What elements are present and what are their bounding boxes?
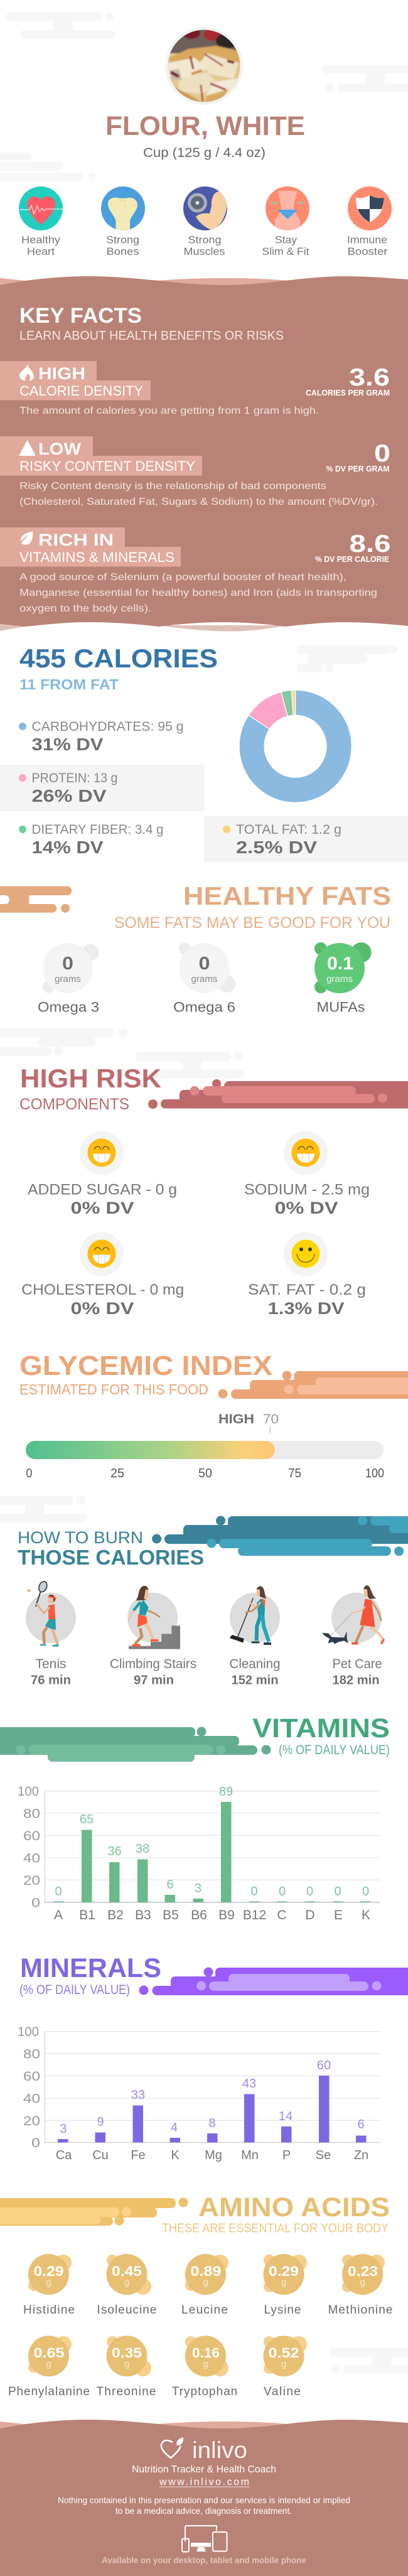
risk: sodium	[244, 1131, 370, 1217]
amino acid bubbles: 0.29	[34, 2263, 64, 2279]
legend: macronutrients: DIETARY FIBER: 3.4 g	[31, 822, 163, 837]
icon: leaf	[21, 531, 33, 545]
amino acid bubbles: 0.29	[269, 2263, 299, 2279]
amino acid bubbles: g	[46, 2277, 51, 2288]
bar chart: vitamins: 0	[279, 1885, 286, 1899]
bar chart: minerals: 60	[23, 2069, 40, 2084]
fact: high calorie density: CALORIES PER GRAM	[306, 388, 390, 397]
food photo	[163, 25, 245, 107]
subheading: minerals: (% OF DAILY VALUE)	[19, 1983, 130, 1997]
fat: omega 3: grams	[55, 974, 81, 984]
amino acid bubbles: 0.52	[269, 2345, 299, 2361]
icon: healthy heart	[19, 186, 63, 257]
amino acid bubbles: g	[360, 2277, 365, 2288]
risk: added sugar: ADDED SUGAR - 0 g	[28, 1182, 177, 1198]
icon: healthy heart: Heart	[27, 245, 55, 257]
decoration: glycemic banner	[218, 1371, 408, 1399]
activity: tennis: Tenis	[35, 1657, 67, 1671]
fat: omega 3: 0	[62, 954, 73, 974]
logo: inlivo	[161, 2437, 247, 2463]
bar chart: minerals: P	[282, 2148, 291, 2162]
icon: strong muscles	[183, 186, 227, 257]
amino acid bubbles: Valine	[264, 2385, 301, 2398]
fact: high calorie density: The amount of calories you are getting from 1 gram is high.	[19, 406, 319, 416]
amino acid bubbles: 0.45	[112, 2263, 142, 2279]
bar chart: vitamins: K	[362, 1908, 370, 1922]
bar chart: vitamins: B5	[163, 1908, 179, 1922]
bar chart: vitamins: 100	[18, 1784, 39, 1799]
fat: mufas: 0.1	[327, 954, 353, 974]
bar chart: vitamins: 3	[195, 1882, 201, 1895]
bar chart: minerals: Se	[316, 2148, 331, 2162]
bar chart: vitamins: 36	[107, 1845, 122, 1858]
icon: strong bones: Strong	[106, 234, 139, 246]
bar chart: vitamins: 60	[23, 1829, 40, 1843]
bar chart: vitamins: 0	[306, 1885, 313, 1899]
panel: key facts	[0, 276, 408, 632]
risk: sodium: 0% DV	[275, 1199, 338, 1217]
amino acid bubbles: g	[281, 2359, 286, 2369]
bar chart: vitamins: C	[277, 1908, 287, 1922]
icon: devices	[182, 2526, 227, 2552]
bar chart: vitamins: 89	[219, 1785, 233, 1799]
bar chart: minerals: 100	[18, 2025, 39, 2039]
fact: rich in vitamins and minerals: % DV PER CALORIE	[315, 554, 389, 564]
fact: rich in vitamins and minerals	[0, 527, 390, 614]
legend: macronutrients: 31% DV	[31, 735, 104, 754]
legend: macronutrients	[0, 719, 408, 862]
fat: omega 6: Omega 6	[173, 1000, 235, 1015]
fact: rich in vitamins and minerals: RICH IN	[38, 531, 114, 549]
amino acid bubbles: Methionine	[328, 2304, 393, 2317]
glycemic index gauge: 25	[110, 1467, 124, 1480]
bar chart: vitamins: 80	[23, 1807, 40, 1821]
risk: saturated fat: SAT. FAT - 0.2 g	[248, 1281, 366, 1298]
icon: immune booster	[347, 186, 392, 257]
activity: pet care: Pet Care	[333, 1657, 382, 1671]
fat: mufas: grams	[326, 974, 353, 984]
fat: omega 6	[173, 943, 235, 1015]
glycemic index gauge	[26, 1412, 384, 1480]
amino acid bubbles: Histidine	[23, 2304, 75, 2317]
risk: added sugar: 0% DV	[70, 1199, 134, 1217]
bar chart: minerals: Mg	[205, 2148, 222, 2162]
icon: immune booster: Immune	[347, 234, 387, 246]
fact: low risky content density: Risky Content density is the relationship of bad components	[19, 481, 326, 492]
amino acid bubbles: g	[46, 2359, 51, 2369]
fact: rich in vitamins and minerals: A good source of Selenium (a powerful booster of heart health),	[19, 572, 346, 583]
fact: high calorie density: 3.6	[349, 364, 390, 391]
title: FLOUR, WHITE	[105, 111, 305, 141]
decoration: minerals banner	[139, 1968, 408, 1995]
fact: low risky content density	[0, 436, 390, 507]
decoration: vitamins banner	[0, 1727, 271, 1762]
decoration: healthy fats banner	[0, 887, 72, 913]
website: www.inlivo.com	[159, 2477, 249, 2487]
fact: high calorie density: CALORIE DENSITY	[19, 383, 143, 399]
fat: omega 6: grams	[191, 974, 217, 984]
fat: omega 6: 0	[198, 954, 210, 974]
bar chart: minerals: Cu	[92, 2148, 109, 2162]
amino acid bubbles: g	[203, 2359, 208, 2369]
activity: cleaning: Cleaning	[230, 1657, 280, 1671]
risk: added sugar	[28, 1131, 177, 1217]
bar chart: vitamins: 0	[31, 1896, 40, 1910]
glycemic index gauge: 75	[288, 1467, 301, 1480]
risk: cholesterol: CHOLESTEROL - 0 mg	[21, 1281, 184, 1298]
heading: how to burn: HOW TO BURN	[18, 1528, 143, 1547]
icon: flame	[19, 364, 34, 380]
bar chart: vitamins: 0	[362, 1885, 369, 1899]
amino acid bubbles: 0.89	[191, 2263, 221, 2279]
subheading: vitamins: (% OF DAILY VALUE)	[279, 1743, 390, 1757]
fact: low risky content density: LOW	[38, 439, 82, 458]
bar chart: vitamins: B1	[79, 1908, 95, 1922]
bar chart: vitamins: B3	[135, 1908, 151, 1922]
serving size: Cup (125 g / 4.4 oz)	[143, 146, 266, 160]
amino acid bubbles: g	[124, 2359, 129, 2369]
bar chart: minerals: 33	[131, 2088, 145, 2102]
icon: healthy heart: Healthy	[21, 234, 61, 246]
fat: mufas: MUFAs	[316, 1000, 365, 1015]
icon: slim and fit	[262, 186, 309, 257]
icon: immune booster: Booster	[348, 245, 388, 257]
amino acid bubbles: 0.16	[192, 2345, 220, 2361]
amino acid bubbles: g	[281, 2277, 286, 2288]
bar chart: vitamins: 0	[334, 1885, 341, 1899]
subheading: calories from fat: 11 FROM FAT	[19, 676, 119, 693]
tagline: Nutrition Tracker & Health Coach	[132, 2464, 276, 2475]
disclaimer: to be a medical advice, diagnosis or treatment.	[115, 2506, 292, 2516]
subheading: healthy fats: SOME FATS MAY BE GOOD FOR YOU	[114, 914, 390, 932]
amino acid bubbles: g	[124, 2277, 129, 2288]
bar chart: minerals: Ca	[56, 2148, 72, 2162]
activity: climbing stairs	[110, 1586, 196, 1688]
decoration: high risk banner	[148, 1079, 408, 1109]
amino acid bubbles: 0.23	[348, 2263, 378, 2279]
fat: omega 3: Omega 3	[38, 1000, 99, 1015]
bar chart: vitamins: 20	[23, 1873, 40, 1888]
glycemic index gauge: 0	[26, 1467, 33, 1480]
bar chart: minerals: 4	[171, 2121, 178, 2135]
heading: amino acids: AMINO ACIDS	[198, 2192, 390, 2223]
fact: low risky content density: RISKY CONTENT DENSITY	[19, 458, 195, 474]
icon: slim and fit: Stay	[275, 234, 297, 246]
icon: strong muscles: Muscles	[183, 245, 225, 257]
bar chart: vitamins	[18, 1784, 380, 1922]
glycemic index gauge: HIGH	[218, 1412, 254, 1426]
legend: macronutrients: 2.5% DV	[236, 838, 317, 857]
bar chart: vitamins: E	[334, 1908, 343, 1922]
bar chart: vitamins: A	[54, 1908, 63, 1922]
heading: key facts: KEY FACTS	[19, 304, 142, 328]
bar chart: minerals: 6	[357, 2118, 365, 2131]
bar chart: vitamins: 0	[55, 1885, 62, 1899]
activity: cleaning: 152 min	[231, 1674, 279, 1688]
fact: low risky content density: 0	[374, 440, 390, 467]
icon: slim and fit: Slim & Fit	[262, 245, 309, 257]
bar chart: vitamins: 6	[166, 1878, 174, 1892]
heading: calories: 455 CALORIES	[19, 644, 218, 673]
legend: macronutrients: 26% DV	[31, 786, 107, 806]
bar chart: minerals: 40	[23, 2092, 40, 2106]
bar chart: minerals: 8	[208, 2116, 216, 2130]
footer	[0, 2420, 408, 2576]
amino acid bubbles: Phenylalanine	[8, 2385, 90, 2398]
bar chart: minerals: 80	[23, 2047, 40, 2062]
activity: pet care	[322, 1585, 385, 1688]
activity: cleaning	[230, 1587, 280, 1688]
amino acid bubbles: Threonine	[97, 2385, 156, 2398]
amino acid bubbles: 0.65	[34, 2345, 64, 2361]
bar chart: minerals: 0	[31, 2136, 40, 2150]
bar chart: minerals: K	[171, 2148, 180, 2162]
amino acid bubbles: 0.35	[112, 2345, 142, 2361]
fact: rich in vitamins and minerals: Manganese (essential for healthy bones) and Iron (aids in transporting	[19, 588, 377, 598]
activity: climbing stairs: Climbing Stairs	[110, 1657, 196, 1671]
risk: saturated fat: 1.3% DV	[268, 1299, 345, 1318]
availability note: Available on your desktop, tablet and mobile phone	[102, 2555, 306, 2565]
activity: pet care: 182 min	[333, 1674, 379, 1688]
decoration: amino acids banner	[0, 2197, 188, 2226]
bar chart: minerals: 20	[23, 2114, 40, 2128]
amino acid bubbles: g	[203, 2277, 208, 2288]
bar chart: vitamins: 40	[23, 1851, 40, 1866]
fact: low risky content density: (Cholesterol, Saturated Fat, Sugars & Sodium) to the amount (%DV/gr).	[19, 497, 378, 507]
disclaimer: Nothing contained in this presentation and our services is intended or implied	[58, 2495, 350, 2505]
heading: high risk: HIGH RISK	[20, 1064, 161, 1093]
heading: vitamins: VITAMINS	[252, 1713, 390, 1743]
amino acid bubbles: Isoleucine	[97, 2304, 157, 2317]
legend: macronutrients: PROTEIN: 13 g	[31, 771, 118, 785]
bar chart: minerals: 60	[317, 2059, 331, 2072]
glycemic index gauge: 50	[198, 1467, 212, 1480]
bar chart: vitamins: B12	[243, 1908, 266, 1922]
bar chart: vitamins: 0	[250, 1885, 258, 1899]
amino acid bubbles	[8, 2254, 393, 2398]
subheading: amino acids: THESE ARE ESSENTIAL FOR YOUR BODY	[162, 2222, 389, 2236]
legend: macronutrients: TOTAL FAT: 1.2 g	[236, 822, 341, 837]
bar chart: vitamins: 38	[136, 1842, 149, 1856]
decoration: burn banner	[152, 1516, 408, 1556]
bar chart: minerals: 14	[279, 2110, 293, 2123]
bar chart: minerals: 9	[97, 2115, 104, 2129]
logo: inlivo: inlivo	[192, 2437, 247, 2463]
fat: mufas	[314, 942, 372, 1015]
amino acid bubbles: Leucine	[181, 2304, 228, 2317]
activity: tennis: 76 min	[31, 1674, 71, 1688]
heading: glycemic index: GLYCEMIC INDEX	[19, 1350, 272, 1381]
bar chart: minerals: Fe	[131, 2148, 146, 2162]
glycemic index gauge: 70	[263, 1412, 279, 1426]
subheading: glycemic index: ESTIMATED FOR THIS FOOD	[19, 1381, 208, 1398]
subheading: key facts: LEARN ABOUT HEALTH BENEFITS OR RISKS	[19, 329, 284, 343]
heading: those calories: THOSE CALORIES	[18, 1546, 204, 1569]
fact: rich in vitamins and minerals: 8.6	[349, 531, 390, 558]
fact: rich in vitamins and minerals: VITAMINS & MINERALS	[19, 549, 174, 565]
bar chart: minerals: Mn	[241, 2148, 259, 2162]
bar chart: vitamins: B6	[191, 1908, 207, 1922]
bar chart: vitamins: 65	[80, 1813, 94, 1826]
fat: omega 3	[38, 943, 99, 1015]
icon: strong bones	[101, 186, 145, 257]
risk: cholesterol	[21, 1232, 184, 1318]
bar chart: minerals: 3	[60, 2122, 67, 2136]
subheading: components: COMPONENTS	[19, 1096, 129, 1113]
legend: macronutrients: CARBOHYDRATES: 95 g	[31, 719, 183, 734]
activity: tennis	[26, 1580, 76, 1688]
heading: minerals: MINERALS	[20, 1953, 161, 1983]
amino acid bubbles: Tryptophan	[172, 2385, 237, 2398]
bar chart: minerals: 43	[242, 2077, 256, 2091]
heading: healthy fats: HEALTHY FATS	[183, 881, 391, 910]
risk: sodium: SODIUM - 2.5 mg	[244, 1182, 370, 1198]
fact: rich in vitamins and minerals: oxygen to the body cells).	[19, 603, 151, 614]
fact: low risky content density: % DV PER GRAM	[326, 464, 389, 473]
glycemic index gauge: 100	[365, 1467, 384, 1480]
risk: cholesterol: 0% DV	[70, 1299, 134, 1318]
activity: climbing stairs: 97 min	[134, 1674, 174, 1688]
donut chart	[239, 690, 352, 802]
fact: high calorie density	[0, 361, 390, 416]
bar chart: minerals	[18, 2025, 380, 2162]
disclaimer	[58, 2495, 350, 2516]
icon: warning triangle	[19, 440, 36, 456]
bar chart: minerals: Zn	[354, 2148, 368, 2162]
fact: high calorie density: HIGH	[38, 364, 85, 383]
risk: saturated fat	[248, 1232, 366, 1318]
legend: macronutrients: 14% DV	[31, 838, 104, 857]
bar chart: vitamins: B2	[107, 1908, 124, 1922]
bar chart: vitamins: B9	[218, 1908, 235, 1922]
amino acid bubbles: Lysine	[264, 2304, 301, 2317]
icon: strong bones: Bones	[107, 245, 139, 257]
bar chart: vitamins: D	[305, 1908, 315, 1922]
icon: strong muscles: Strong	[188, 234, 221, 246]
